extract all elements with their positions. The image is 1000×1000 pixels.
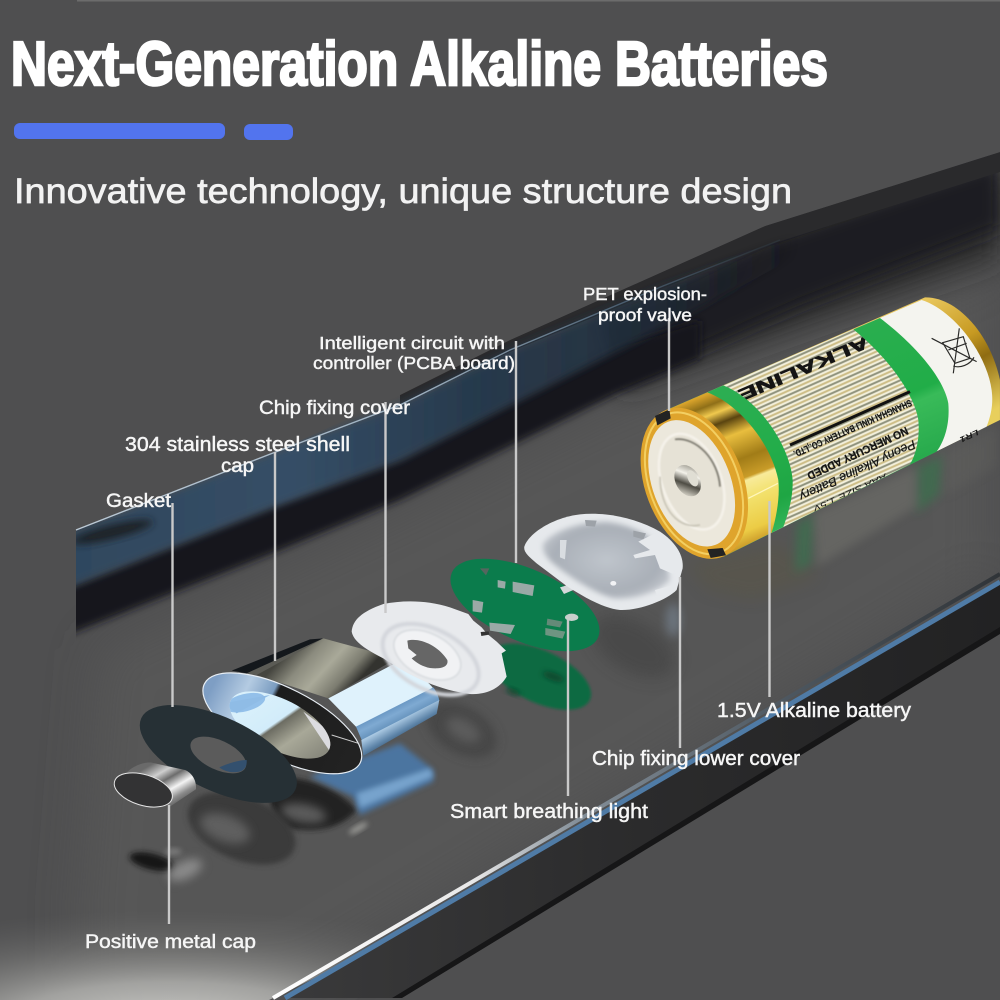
battery: black rim notches: [655, 409, 671, 425]
label: smart breathing light: Smart breathing light: [450, 801, 648, 823]
reflection: lower cover: [582, 603, 685, 691]
battery: printed label text: SHANGHAI KINLI BATTERY CO.,LTD.: [791, 397, 913, 459]
battery: end face: [632, 408, 752, 559]
reflection: battery: [687, 427, 997, 600]
label: chip fixing cover: Chip fixing cover: [259, 398, 411, 419]
battery: gold highlight ridge: [748, 483, 778, 498]
cover: hole: [407, 640, 448, 668]
cover: body: [352, 601, 507, 694]
label: 1.5V alkaline battery: 1.5V Alkaline battery: [717, 700, 911, 722]
shell: front ring: [189, 652, 376, 794]
label: intelligent circuit: Intelligent circuit with: [319, 333, 505, 353]
battery: near green band: [667, 385, 793, 557]
shell: inner seam: [332, 735, 358, 743]
label: intelligent circuit: controller (PCBA board): [313, 353, 515, 373]
battery: white section: [667, 300, 992, 557]
label: gasket: Gasket: [106, 491, 172, 512]
battery: printed label text: [736, 332, 918, 515]
battery: far green band: [667, 318, 949, 557]
gasket: centre hole: [185, 729, 252, 781]
lower cover: tabs: [560, 520, 680, 595]
battery: printed label text: AAA SIZE 1.5V: [810, 471, 890, 515]
battery: printed label text: NO MERCURY ADDED: [805, 424, 910, 481]
reflection: gasket: [177, 778, 306, 879]
rim: thin highlight line: [76, 240, 780, 530]
rim: dark pocket upper left: [70, 515, 154, 549]
cap: barrel: [123, 763, 196, 807]
label: 304 stainless steel shell cap: cap: [221, 456, 254, 477]
reflection: shell blue: [310, 743, 433, 815]
shell: body: [223, 638, 439, 767]
rim: upper dark bevel: [400, 152, 1000, 405]
circuit board: chips: [473, 580, 578, 639]
rim: lower dark band: [60, 320, 700, 638]
accent bars: [14, 123, 293, 140]
positive metal cap: [110, 763, 196, 813]
front edge of tabletop: [273, 574, 1000, 998]
1.5V alkaline battery: [640, 297, 1000, 559]
shell: dark back streaks: [232, 638, 323, 673]
label: PET explosion-proof valve: PET explosion-: [583, 284, 707, 304]
label: positive metal cap: Positive metal cap: [85, 932, 256, 953]
cover: raised collar shading: [371, 609, 490, 709]
reflection: white cover: [417, 691, 506, 769]
304 stainless steel shell: [202, 638, 440, 774]
label: 304 stainless steel shell cap: [125, 434, 350, 661]
battery: front rim: [620, 392, 768, 574]
reflections on surface: [128, 427, 997, 886]
reflection: shell dark: [270, 777, 357, 830]
subtitle: Innovative technology, unique structure design: [14, 172, 792, 211]
battery: positive nub: [669, 460, 706, 501]
rim: back edge group: [60, 152, 1000, 638]
shell: olive band: [257, 638, 397, 698]
shell: blue band: [356, 687, 439, 741]
battery: near gold band: [667, 392, 779, 557]
battery: far gold end: [667, 297, 1000, 557]
label: intelligent circuit: [313, 333, 516, 563]
reflection: circuit board: [479, 630, 601, 723]
battery: printed label text: Peony Alkaline Battery: [796, 437, 918, 504]
lower cover: concave interior: [543, 522, 670, 599]
rim: blue band: [76, 274, 700, 588]
label: chip fixing lower cover: Chip fixing lower cover: [592, 748, 800, 770]
reflection: cap: [128, 848, 176, 875]
battery: printed label text: ALKALINE: [736, 332, 872, 404]
cap: front face: [110, 767, 176, 813]
shell: inner view: [230, 691, 330, 759]
title: Next-Generation Alkaline Batteries: [11, 30, 828, 99]
reflection: highlight: [348, 820, 369, 836]
battery: striped label: [667, 329, 919, 557]
cover: notch: [481, 631, 489, 636]
label: 304 stainless steel shell cap: 304 stainless steel shell: [125, 434, 350, 456]
shell: bright band: [328, 662, 433, 727]
label: PET explosion-proof valve: proof valve: [598, 305, 692, 325]
battery: printed rule: [790, 392, 910, 445]
label: PET explosion-proof valve: [583, 284, 707, 411]
gasket: [126, 685, 311, 823]
chip fixing lower cover: [524, 514, 683, 610]
battery: recycling bin mark: [932, 328, 977, 373]
circuit board and white fixing cover: [352, 540, 613, 709]
green circuit board: [437, 540, 613, 670]
top hairline: [77, 0, 1000, 2]
rim: far dark gradient zone: [620, 178, 1000, 390]
battery: LR1 mark: LR1: [958, 428, 980, 444]
shell: lower band: [361, 700, 439, 756]
